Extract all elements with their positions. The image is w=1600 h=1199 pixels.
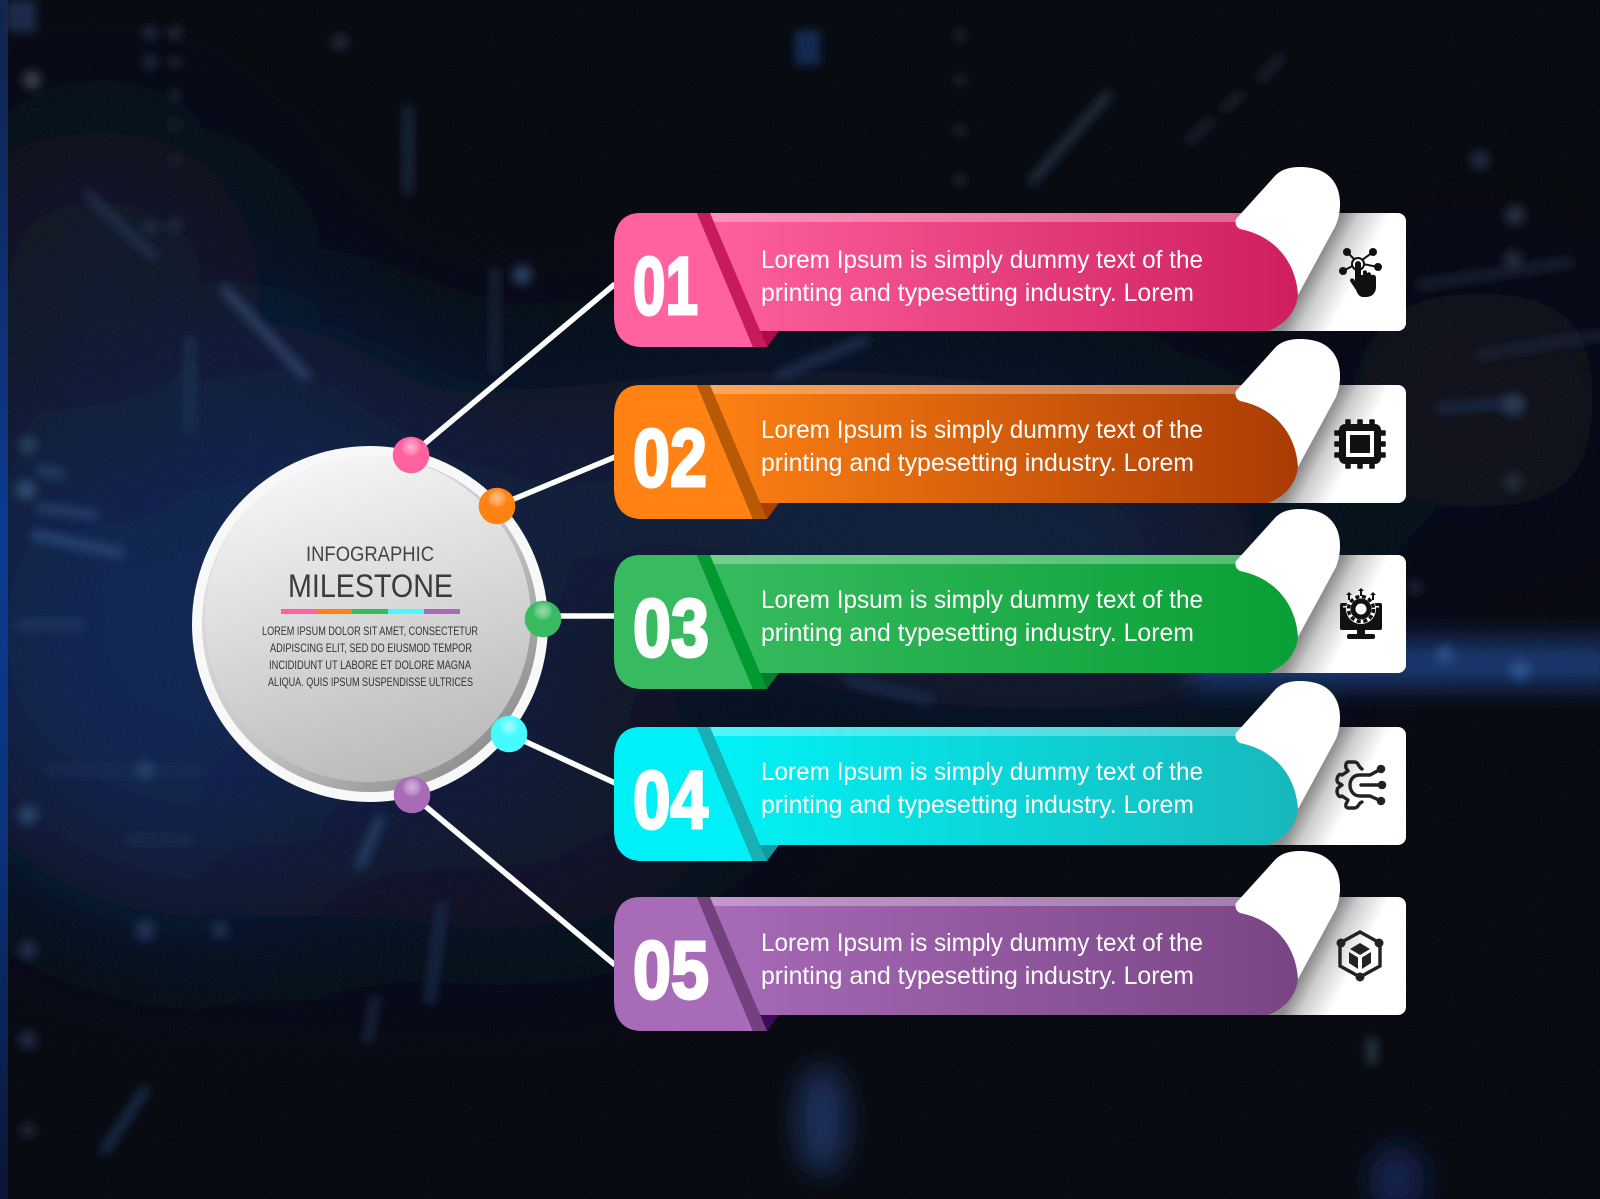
text 04 <box>761 758 1203 819</box>
badge body text <box>262 624 478 689</box>
connector lines <box>411 284 615 965</box>
badge heading: milestone: MILESTONE <box>288 568 453 604</box>
panel: milestone 04 <box>614 681 1406 861</box>
text 05: Lorem Ipsum is simply dummy text of the <box>761 929 1203 957</box>
text 05: printing and typesetting industry. Lorem <box>761 962 1194 990</box>
badge body text: LOREM IPSUM DOLOR SIT AMET, CONSECTETUR <box>262 624 478 638</box>
central circle: milestone badge <box>192 446 548 802</box>
text 01: Lorem Ipsum is simply dummy text of the <box>761 246 1203 274</box>
text 04: Lorem Ipsum is simply dummy text of the <box>761 758 1203 786</box>
number 02: 02 <box>633 413 707 504</box>
icon: microchip <box>1335 420 1385 468</box>
panel: milestone 02 <box>614 339 1406 519</box>
panel: milestone 01 <box>614 167 1406 347</box>
text 02 <box>761 416 1203 477</box>
five colour underline <box>281 609 460 614</box>
connector balls <box>393 437 561 813</box>
text 01: printing and typesetting industry. Lorem <box>761 279 1194 307</box>
icon: monitor with gear <box>1340 588 1382 639</box>
text 03: printing and typesetting industry. Lorem <box>761 619 1194 647</box>
panel: milestone 03 <box>614 509 1406 689</box>
icon: cube in hexagon <box>1336 932 1384 982</box>
text 02: printing and typesetting industry. Lorem <box>761 449 1194 477</box>
text 04: printing and typesetting industry. Lorem <box>761 791 1194 819</box>
icon: hand touching network <box>1339 248 1382 297</box>
text 02: Lorem Ipsum is simply dummy text of the <box>761 416 1203 444</box>
number 04: 04 <box>633 755 708 846</box>
text 03: Lorem Ipsum is simply dummy text of the <box>761 586 1203 614</box>
badge body text: ALIQUA. QUIS IPSUM SUSPENDISSE ULTRICES <box>268 675 473 689</box>
number 01: 01 <box>633 241 698 332</box>
text 03 <box>761 586 1203 647</box>
number 03: 03 <box>633 583 709 674</box>
panel: milestone 05 <box>614 851 1406 1031</box>
number 05: 05 <box>633 925 709 1016</box>
badge body text: INCIDIDUNT UT LABORE ET DOLORE MAGNA <box>269 658 471 672</box>
text 05 <box>761 929 1203 990</box>
badge body text: ADIPISCING ELIT, SED DO EIUSMOD TEMPOR <box>270 641 472 655</box>
icon: gear with circuit lines <box>1337 762 1385 808</box>
text 01 <box>761 246 1203 307</box>
badge heading: infographic: INFOGRAPHIC <box>306 543 434 566</box>
